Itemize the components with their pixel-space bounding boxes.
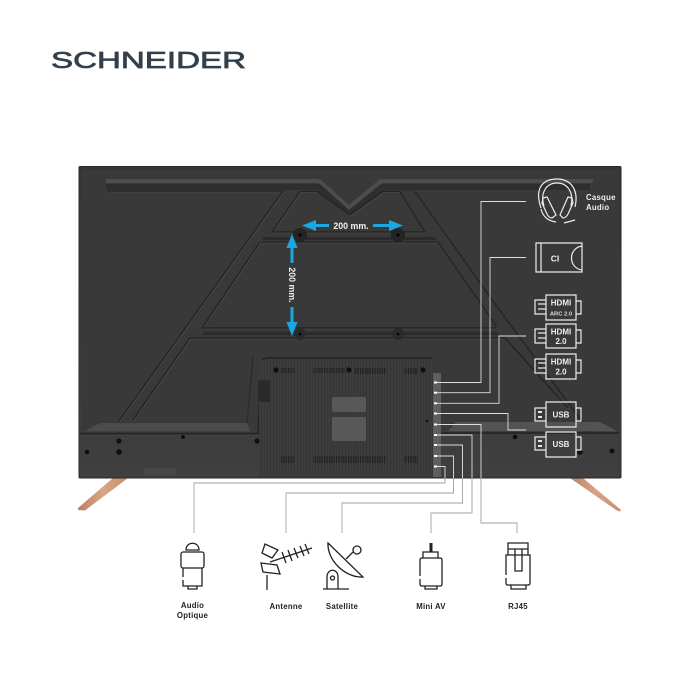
left stand leg [78, 478, 128, 510]
label: casque audio: Casque [586, 193, 616, 202]
rear moulding lines [108, 191, 591, 433]
icon: satellite dish [323, 543, 363, 589]
top moulded rib [106, 179, 593, 215]
logo: Schneider: SCHNEIDER [51, 47, 246, 73]
icon: USB first [535, 402, 581, 427]
icon: audio optique [181, 543, 204, 589]
connector lines to bottom icons [194, 478, 517, 533]
label: mini AV: Mini AV [416, 602, 446, 611]
icon: USB first: USB [553, 410, 570, 420]
port markers [434, 382, 437, 468]
arrow: vertical 200 mm [286, 234, 298, 336]
icon: HDMI ARC 2.0: ARC 2.0 [550, 312, 572, 318]
label: satellite: Satellite [326, 602, 358, 611]
lower light bands [80, 356, 619, 434]
VESA mounts [293, 228, 405, 340]
label: audio optique: Optique [177, 611, 209, 620]
icon: USB second [535, 432, 581, 457]
icon: HDMI ARC 2.0: HDMI [551, 298, 571, 308]
icon: HDMI ARC 2.0 [535, 295, 581, 320]
icon: HDMI 2.0 first: 2.0 [555, 337, 567, 346]
icon: HDMI 2.0 first: HDMI [551, 328, 571, 336]
icon: CI card: CI [551, 254, 559, 264]
screws [85, 367, 614, 455]
arrow: horizontal 200 mm [302, 220, 403, 231]
label: antenne: Antenne [270, 602, 303, 611]
label: audio optique: Audio [181, 601, 204, 610]
icon: CI card [536, 243, 582, 272]
icon: headset [539, 179, 576, 223]
rear electronics cover [144, 360, 441, 477]
icon: HDMI 2.0 second [535, 354, 581, 379]
label: RJ45: RJ45 [508, 602, 528, 611]
label: horizontal 200 mm: 200 mm. [333, 221, 369, 231]
vents [281, 368, 418, 463]
right stand leg [570, 478, 621, 512]
connector lines to side icons [435, 202, 526, 478]
icon: HDMI 2.0 first [535, 324, 581, 348]
label: vertical 200 mm: 200 mm. [287, 267, 297, 303]
TV back panel [79, 166, 621, 478]
icon: HDMI 2.0 second: HDMI [551, 358, 571, 366]
icon: USB second: USB [553, 440, 570, 449]
label: casque audio: Audio [586, 203, 609, 212]
icon: RJ45 [506, 543, 530, 589]
icon: mini AV [420, 543, 442, 589]
icon: antenne [261, 544, 312, 590]
icon: HDMI 2.0 second: 2.0 [555, 368, 567, 376]
